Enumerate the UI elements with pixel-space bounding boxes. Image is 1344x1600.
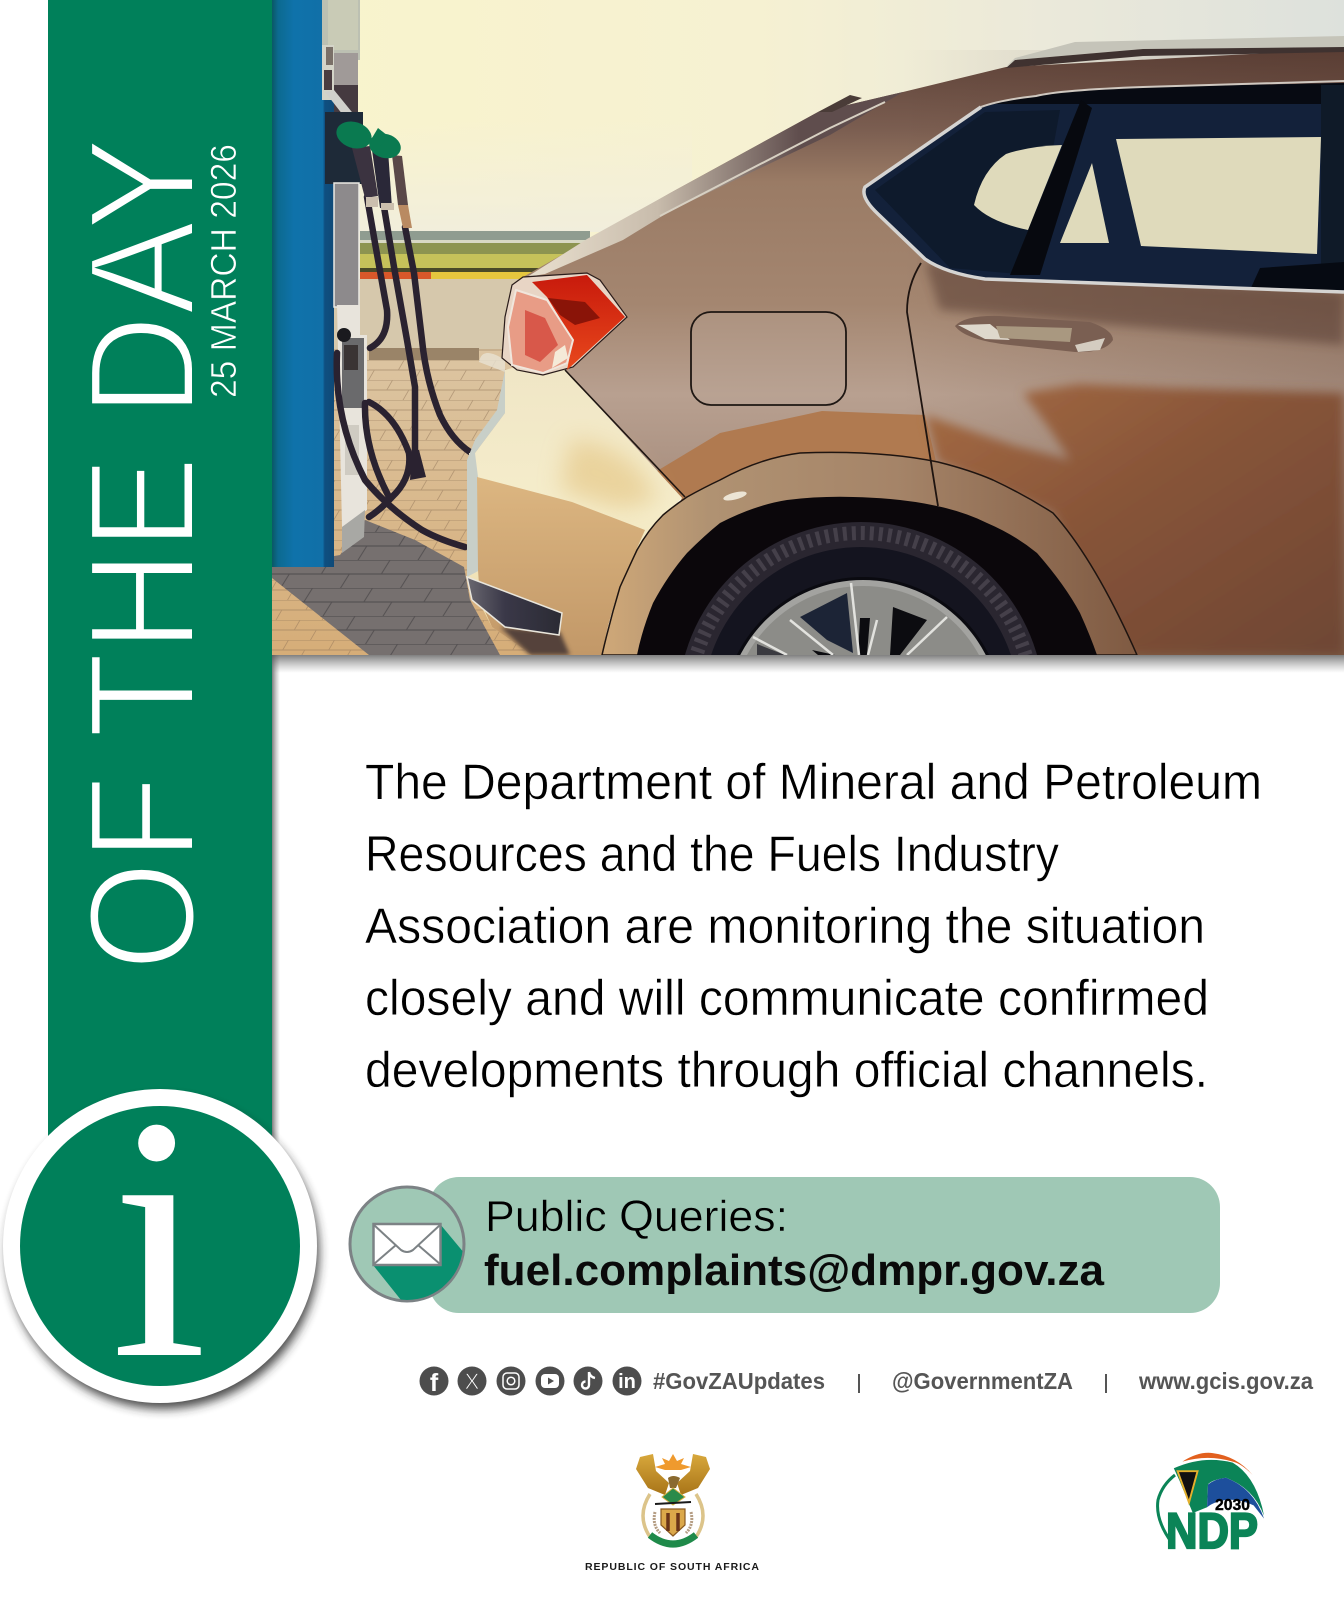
social handles: @GovernmentZA: [892, 1368, 1073, 1394]
tail light: [502, 273, 627, 375]
statement text: Resources and the Fuels Industry: [365, 826, 1059, 882]
social handles: #GovZAUpdates: [653, 1368, 825, 1394]
body crease line: [565, 370, 685, 497]
photo bottom shadow: [272, 655, 1344, 673]
roof rail: [1006, 36, 1344, 67]
NDP 2030 logo: [1158, 1453, 1264, 1559]
spear: [655, 1502, 691, 1504]
icon: instagram: [496, 1366, 526, 1396]
fuel nozzle handles: [352, 146, 412, 228]
coat of arms: [636, 1454, 710, 1544]
icon: tiktok: [574, 1366, 602, 1396]
alloy wheel: [740, 580, 986, 655]
green title banner: [48, 0, 280, 1150]
queries label: Public Queries:: [485, 1192, 788, 1241]
arch highlight: [723, 492, 747, 500]
social handles: www.gcis.gov.za: [1138, 1368, 1313, 1394]
motto ribbon: [650, 1535, 696, 1544]
lower reflections: [647, 384, 1344, 655]
social icons: [420, 1366, 642, 1397]
shield: [661, 1509, 685, 1536]
info badge: [3, 1046, 319, 1431]
badge shadow: [7, 1097, 319, 1409]
fuel pump: [272, 0, 367, 567]
statement text: [365, 754, 1262, 1098]
icon: youtube: [536, 1366, 564, 1396]
social handles: [653, 1368, 1313, 1394]
photo sky: [358, 0, 1344, 279]
wheel well: [637, 497, 1097, 655]
bumper trim: [467, 577, 562, 635]
NDP: NDP: [1166, 1503, 1258, 1559]
icon: facebook: f: [430, 1369, 439, 1397]
rear bumper: [467, 353, 682, 655]
date: 25 MARCH 2026: [203, 144, 244, 398]
statement text: Association are monitoring the situation: [365, 898, 1205, 954]
2030: 2030: [1215, 1497, 1250, 1514]
icon: linkedin: in: [618, 1371, 636, 1393]
wheat oval: [643, 1494, 703, 1537]
mail icon: [350, 1187, 470, 1310]
green flag: [1174, 1460, 1264, 1516]
icon: x: X: [465, 1369, 480, 1394]
info letter i: i: [111, 1046, 207, 1431]
car body: [466, 36, 1344, 655]
blue band: [1207, 1478, 1264, 1519]
queries email: fuel.complaints@dmpr.gov.za: [484, 1246, 1105, 1295]
icon: linkedin: [612, 1366, 642, 1396]
under-window shading: [925, 262, 1344, 345]
orange arc: [1182, 1453, 1253, 1475]
roof edge: [527, 92, 903, 277]
right wing: [677, 1454, 710, 1495]
public queries pill: [350, 1177, 1220, 1313]
rear tyre: [685, 522, 1037, 655]
window glass: [974, 137, 1321, 254]
side window: [860, 80, 1344, 292]
logo ring: [1158, 1475, 1175, 1543]
green diamond: [662, 1488, 685, 1505]
door shut line: [907, 263, 938, 506]
left wing: [636, 1454, 669, 1495]
black triangle: [1178, 1471, 1198, 1502]
coat of arms caption: REPUBLIC OF SOUTH AFRICA: [585, 1561, 759, 1573]
fuel door: [691, 312, 846, 405]
logo flag: [1174, 1453, 1264, 1519]
door handle: [955, 316, 1113, 352]
fuel nozzles: [336, 122, 401, 158]
fuel hoses: [337, 197, 470, 547]
secretary bird head: [668, 1476, 680, 1488]
wheel arch: [602, 452, 1137, 655]
photo ground: [272, 231, 590, 655]
icon: facebook: [420, 1366, 448, 1397]
title: OF THE DAY: OF THE DAY: [57, 137, 226, 971]
rising sun: [655, 1454, 691, 1470]
statement text: closely and will communicate confirmed: [365, 970, 1209, 1026]
icon: x: [458, 1366, 486, 1396]
statement text: developments through official channels.: [365, 1042, 1208, 1098]
hero photo: car at fuel pump: [272, 0, 1344, 655]
hose end clamp: [410, 450, 426, 480]
statement text: The Department of Mineral and Petroleum: [365, 754, 1262, 810]
